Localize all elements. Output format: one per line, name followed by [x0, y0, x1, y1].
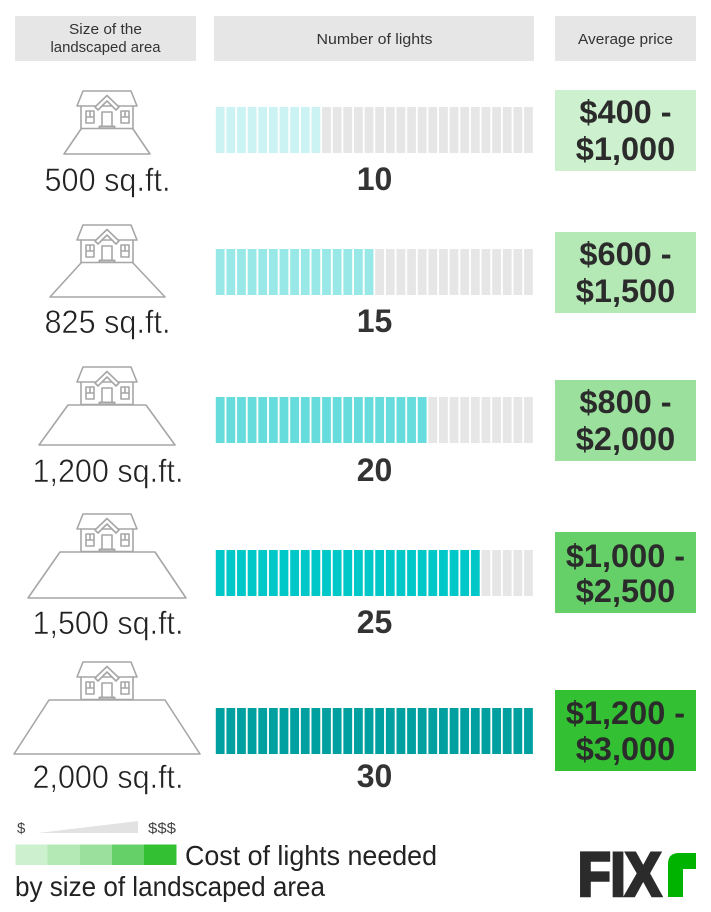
- header: average price: [555, 16, 696, 61]
- price box $1,200 - $3,000: $3,000: [576, 731, 675, 767]
- header: number of lights: [214, 16, 534, 61]
- legend caption: [15, 840, 437, 902]
- icon: house on small lot: [64, 91, 150, 154]
- price box $400 - $1,000: $400 -: [579, 94, 672, 130]
- legend: [15, 820, 437, 902]
- area label 500 sq.ft.: 500 sq.ft.: [44, 162, 170, 198]
- row: 500 sq.ft.: [44, 90, 696, 198]
- light bar: 30 of 30: [216, 708, 533, 754]
- price box $600 - $1,500: [555, 232, 696, 313]
- price box $400 - $1,000: [555, 90, 696, 171]
- header: number of lights: Number of lights: [316, 31, 432, 48]
- price box $800 - $2,000: $2,000: [576, 421, 675, 457]
- header: size of the landscaped area: landscaped area: [50, 39, 161, 56]
- number of lights 15: 15: [357, 303, 392, 339]
- price box $1,000 - $2,500: $1,000 -: [566, 538, 685, 574]
- legend: price scale wedge: [17, 820, 177, 837]
- number of lights 20: 20: [357, 452, 392, 488]
- icon: house on medium-small lot: [50, 225, 165, 297]
- number of lights 25: 25: [357, 604, 392, 640]
- header: size of the landscaped area: Size of the: [69, 21, 142, 38]
- legend caption: Cost of lights needed: [185, 840, 437, 871]
- price box $1,200 - $3,000: $1,200 -: [566, 695, 685, 731]
- price box $400 - $1,000: $1,000: [576, 131, 675, 167]
- row: 2,000 sq.ft.: [14, 662, 696, 795]
- header: average price: Average price: [578, 31, 673, 48]
- price box $1,000 - $2,500: $2,500: [576, 573, 675, 609]
- price box $1,200 - $3,000: [555, 690, 696, 771]
- light bar: 25 of 30: [216, 550, 533, 596]
- price box $1,000 - $2,500: [555, 532, 696, 613]
- row: 1,200 sq.ft.: [32, 367, 696, 489]
- logo: Fixr: FIX: [578, 840, 661, 908]
- area label 1,200 sq.ft.: 1,200 sq.ft.: [32, 453, 184, 489]
- row: 825 sq.ft.: [44, 225, 696, 340]
- price box $800 - $2,000: $800 -: [579, 384, 672, 420]
- legend: price scale wedge: $: [17, 820, 26, 837]
- legend: colour swatches: [16, 844, 176, 865]
- legend caption: by size of landscaped area: [15, 871, 325, 902]
- light bar: 10 of 30: [216, 107, 533, 153]
- area label 2,000 sq.ft.: 2,000 sq.ft.: [32, 759, 184, 795]
- price box $600 - $1,500: $1,500: [576, 273, 675, 309]
- number of lights 30: 30: [357, 758, 392, 794]
- legend: price scale wedge: $$$: [148, 820, 177, 837]
- light bar: 20 of 30: [216, 397, 533, 443]
- icon: house on large lot: [28, 514, 186, 598]
- price box $600 - $1,500: $600 -: [579, 236, 672, 272]
- light bar: 15 of 30: [216, 249, 533, 295]
- area label 1,500 sq.ft.: 1,500 sq.ft.: [32, 605, 184, 641]
- icon: house on largest lot: [14, 662, 200, 754]
- number of lights 10: 10: [357, 161, 392, 197]
- area label 825 sq.ft.: 825 sq.ft.: [44, 304, 170, 340]
- row: 1,500 sq.ft.: [28, 514, 696, 641]
- header: size of the landscaped area: [15, 16, 196, 61]
- price box $800 - $2,000: [555, 380, 696, 461]
- icon: house on medium lot: [39, 367, 175, 445]
